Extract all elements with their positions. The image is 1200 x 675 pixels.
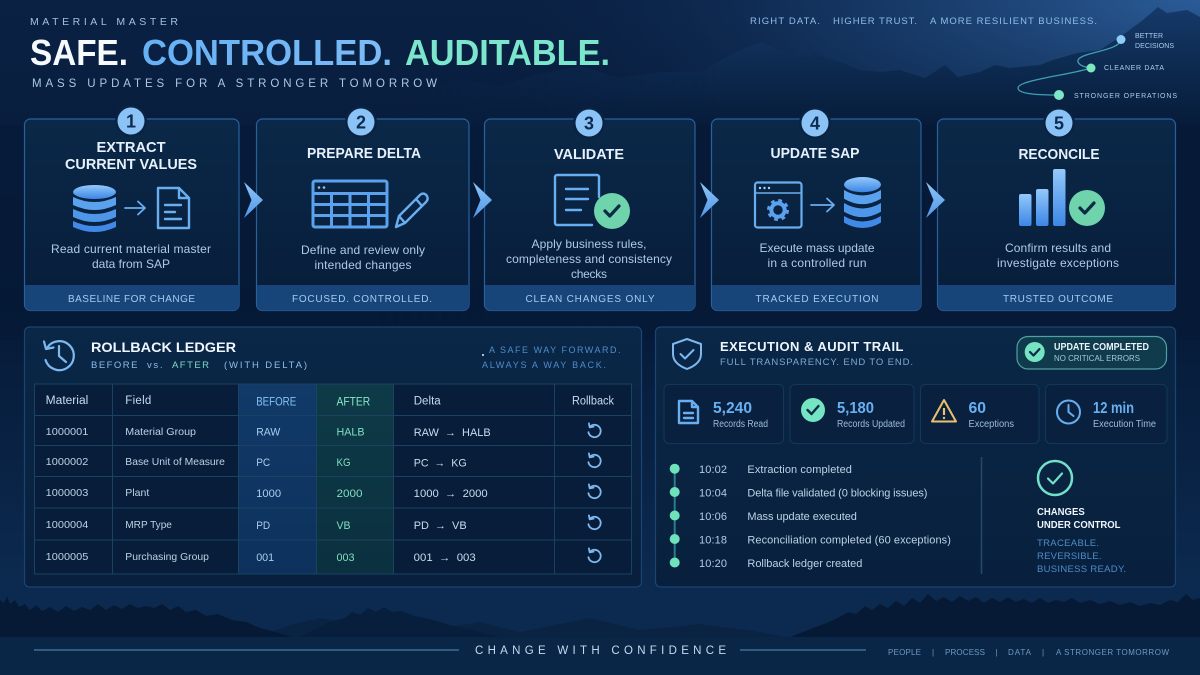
row: 1000002: PC → KG [414, 458, 467, 470]
footer slogan: CHANGE WITH CONFIDENCE [475, 645, 726, 657]
table: rollback ledger rows: Rollback [572, 396, 614, 408]
subheading: before vs after: AFTER [172, 360, 209, 371]
table: rollback ledger rows: Material [46, 395, 88, 407]
timeline: audit events: 10:06 [699, 511, 727, 523]
path graphic: outcomes: BETTER [1135, 33, 1163, 40]
row: 1000004: 1000004 [46, 519, 88, 531]
row: 1000005: 003 [336, 552, 354, 564]
row: 1000003: 1000003 [46, 487, 88, 499]
row: 1000002: KG [336, 457, 350, 469]
subheading: before vs after: (WITH DELTA) [224, 360, 307, 371]
panel: step 4 update sap [712, 107, 921, 310]
panel: step 1 extract: CURRENT VALUES [65, 156, 197, 173]
stat card: records read [664, 384, 784, 444]
panel: step 1 extract: Read current material master [51, 242, 211, 256]
subtitle: MASS UPDATES FOR A STRONGER TOMORROW [32, 78, 437, 90]
title: SAFE. [30, 32, 128, 73]
stat card: records updated: 5,180 [837, 400, 874, 417]
panel: rollback ledger [24, 327, 642, 587]
stat card: execution time: 12 min [1093, 400, 1134, 417]
top right tagline: RIGHT DATA. [750, 16, 820, 27]
icon: rollback clock [44, 341, 74, 370]
timeline: audit events [670, 464, 951, 570]
row: 1000005 [46, 548, 601, 564]
arrow: step 3 to 4 [700, 182, 719, 218]
panel: step 1 extract: data from SAP [92, 257, 170, 271]
panel: step 4 update sap: TRACKED EXECUTION [756, 294, 878, 305]
stat card: exceptions [920, 384, 1039, 444]
row: 1000005: 001 [256, 552, 274, 564]
subheading: full transparency: FULL TRANSPARENCY. END TO END. [720, 357, 913, 368]
stat card: execution time [1046, 384, 1167, 444]
panel: execution and audit trail [656, 327, 1176, 587]
panel: step 2 prepare delta: FOCUSED. CONTROLLED. [292, 294, 432, 305]
callout: changes under control: UNDER CONTROL [1037, 520, 1120, 531]
panel: step 5 reconcile: 5 [1054, 114, 1064, 134]
row: 1000004: MRP Type [125, 519, 172, 531]
timeline: audit events: 10:04 [699, 488, 727, 500]
row: 1000003 [46, 484, 601, 500]
panel: step 5 reconcile: Confirm results and [1005, 241, 1111, 255]
path graphic: outcomes: DECISIONS [1135, 43, 1174, 50]
stat card: records updated [790, 384, 914, 444]
arrow: step 4 to 5 [926, 182, 945, 218]
stat card: records read: Records Read [713, 419, 768, 430]
badge: update completed [1017, 336, 1166, 369]
footer tags: DATA [1008, 648, 1032, 657]
subheading: before vs after [91, 360, 307, 371]
panel: step 5 reconcile [938, 107, 1176, 310]
panel: step 2 prepare delta: 2 [356, 112, 366, 132]
timeline: audit events: 10:20 [699, 558, 727, 570]
callout: changes under control [1037, 461, 1126, 575]
row: 1000001: 1000001 [46, 426, 88, 438]
stat card: exceptions: 60 [968, 400, 986, 417]
row: 1000002: PC [256, 457, 270, 469]
title [30, 32, 610, 73]
panel: step 2 prepare delta: intended changes [314, 258, 412, 272]
table: rollback ledger rows: Delta [414, 396, 441, 408]
footer tags: | [996, 648, 998, 657]
path graphic: outcomes: STRONGER OPERATIONS [1074, 93, 1177, 100]
callout: changes under control: CHANGES [1037, 507, 1085, 518]
callout: safe way forward: ALWAYS A WAY BACK. [482, 360, 606, 370]
row: 1000001: Material Group [125, 426, 196, 438]
heading: rollback ledger: ROLLBACK LEDGER [91, 340, 236, 355]
callout: changes under control: REVERSIBLE. [1037, 551, 1102, 562]
timeline: audit events: Delta file validated (0 blocking issues) [747, 488, 927, 500]
table: rollback ledger rows: AFTER [336, 396, 370, 408]
footer tags: | [932, 648, 934, 657]
panel: step 3 validate: checks [571, 267, 607, 281]
panel: step 1 extract [24, 105, 239, 310]
top right tagline: A MORE RESILIENT BUSINESS. [930, 16, 1097, 27]
row: 1000003: Plant [125, 487, 149, 499]
panel: step 5 reconcile: TRUSTED OUTCOME [1003, 294, 1113, 305]
panel: step 2 prepare delta: PREPARE DELTA [307, 145, 421, 162]
row: 1000003: 1000 [256, 488, 281, 500]
stat card: exceptions: Exceptions [968, 419, 1014, 430]
stat card: execution time: Execution Time [1093, 419, 1156, 430]
panel: step 3 validate: 3 [584, 114, 594, 134]
panel: step 3 validate [484, 107, 695, 310]
panel: step 1 extract: BASELINE FOR CHANGE [68, 294, 195, 305]
row: 1000001: RAW → HALB [414, 427, 491, 439]
footer tags: | [1042, 648, 1044, 657]
row: 1000004: PD → VB [414, 520, 467, 532]
panel: step 5 reconcile: investigate exceptions [997, 256, 1119, 270]
icon: shield [673, 339, 701, 369]
panel: step 2 prepare delta: Define and review only [301, 243, 425, 257]
panel: step 4 update sap: Execute mass update [760, 241, 875, 255]
table: rollback ledger rows: Field [125, 395, 151, 407]
stat card: records read: 5,240 [713, 400, 752, 417]
footer tags [888, 648, 1169, 657]
row: 1000002: Base Unit of Measure [125, 456, 225, 468]
panel: step 3 validate: completeness and consistency [506, 252, 672, 266]
footer tags: PEOPLE [888, 648, 921, 657]
row: 1000003: 2000 [336, 488, 362, 500]
path graphic: outcomes [1018, 33, 1177, 100]
arrow: step 2 to 3 [473, 182, 492, 218]
panel: step 3 validate: Apply business rules, [532, 237, 646, 251]
badge: update completed: NO CRITICAL ERRORS [1054, 353, 1140, 363]
callout: safe way forward: A SAFE WAY FORWARD. [489, 345, 620, 355]
footer tags: A STRONGER TOMORROW [1056, 648, 1169, 657]
callout: safe way forward [482, 345, 620, 370]
table: rollback ledger rows: BEFORE [256, 396, 296, 408]
panel: step 3 validate: VALIDATE [554, 146, 624, 163]
title: AUDITABLE. [405, 32, 610, 73]
timeline: audit events: Extraction completed [747, 464, 852, 476]
subheading: before vs after: BEFORE [91, 360, 138, 371]
row: 1000004 [46, 515, 601, 532]
timeline: audit events: Reconciliation completed (60 exceptions) [747, 534, 951, 546]
table: rollback ledger rows [34, 384, 632, 574]
callout: changes under control: BUSINESS READY. [1037, 564, 1126, 575]
row: 1000004: VB [336, 520, 350, 532]
panel: step 4 update sap: UPDATE SAP [770, 145, 860, 162]
row: 1000001: RAW [256, 426, 281, 438]
footer tags: PROCESS [945, 648, 985, 657]
row: 1000005: 001 → 003 [414, 552, 476, 564]
panel: step 5 reconcile: RECONCILE [1018, 146, 1100, 163]
panel: step 1 extract: 1 [126, 112, 136, 132]
stat card: records updated: Records Updated [837, 419, 905, 430]
badge: update completed: UPDATE COMPLETED [1054, 342, 1149, 353]
panel: step 4 update sap: in a controlled run [768, 256, 866, 270]
timeline: audit events: 10:18 [699, 534, 727, 546]
row: 1000003: 1000 → 2000 [414, 488, 488, 500]
row: 1000004: PD [256, 520, 270, 532]
path graphic: outcomes: CLEANER DATA [1104, 65, 1164, 72]
top right tagline [750, 16, 1097, 27]
top right tagline: HIGHER TRUST. [833, 16, 917, 27]
row: 1000005: 1000005 [46, 551, 88, 563]
panel: step 1 extract: EXTRACT [96, 139, 166, 156]
timeline: audit events: Rollback ledger created [747, 558, 862, 570]
panel: step 2 prepare delta [256, 106, 469, 310]
row: 1000002: 1000002 [46, 456, 88, 468]
row: 1000001 [46, 423, 601, 439]
row: 1000005: Purchasing Group [125, 551, 209, 563]
timeline: audit events: 10:02 [699, 464, 727, 476]
timeline: audit events: Mass update executed [747, 511, 857, 523]
callout: changes under control: TRACEABLE. [1037, 538, 1099, 549]
title: CONTROLLED. [142, 32, 392, 73]
panel: step 4 update sap: 4 [810, 114, 820, 134]
arrow: step 1 to 2 [244, 182, 263, 218]
subheading: before vs after: vs. [147, 360, 162, 371]
panel: step 3 validate: CLEAN CHANGES ONLY [526, 294, 655, 305]
heading: execution and audit trail: EXECUTION & AUDIT TRAIL [720, 339, 904, 354]
eyebrow: material master: MATERIAL MASTER [30, 16, 178, 28]
row: 1000002 [46, 453, 601, 470]
row: 1000001: HALB [336, 426, 364, 438]
